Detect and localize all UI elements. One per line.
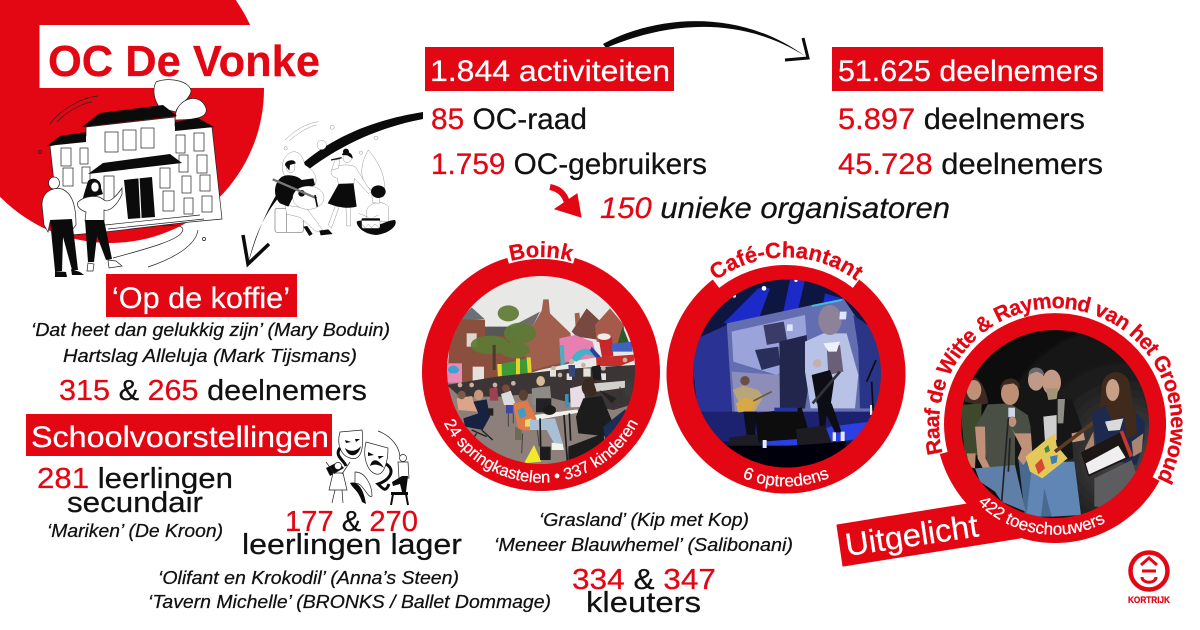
heading: Schoolvoorstellingen: Schoolvoorstellingen — [31, 421, 329, 454]
stat: 150 unieke organisatoren: 150 unieke organisatoren — [600, 192, 950, 225]
black curved arrow: activities to deelnemers — [603, 21, 808, 60]
title: OC De Vonke: OC De Vonke — [48, 37, 320, 86]
stat: 177 & 270 leerlingen lager: leerlingen lager — [242, 529, 462, 561]
photo: Boink crowd and bouncy castles — [447, 276, 635, 464]
stat: 281 leerlingen secundair: secundair — [67, 487, 203, 519]
stat: 5.897 deelnemers: 5.897 deelnemers — [838, 103, 1085, 136]
heading: 51.625 deelnemers: 51.625 deelnemers — [838, 55, 1098, 88]
caption: 6 optredens: 6 optredens — [744, 468, 829, 488]
red arrow to organisers — [550, 187, 581, 217]
red background circle — [0, 0, 264, 243]
caption: 24 springkastelen, 337 kinderen: 24 springkastelen • 337 kinderen — [444, 419, 638, 483]
heading: 1.844 activiteiten — [425, 47, 674, 91]
text: Mariken: ‘Mariken’ (De Kroon) — [47, 521, 223, 541]
stat: 177 & 270 leerlingen lager — [242, 506, 462, 561]
stat: 281 leerlingen secundair: 281 leerlingen — [37, 463, 233, 495]
label: Café-Chantant: Café-Chantant — [710, 241, 863, 281]
heading: Op de koffie: ‘Op de koffie’ — [112, 282, 290, 315]
panel: Uitgelicht ribbon — [837, 504, 1020, 566]
photo: concert stage — [693, 280, 881, 468]
label: Raaf de Witte & Raymond van het Groenewoud: Raaf de Witte & Raymond van het Groenewoud — [924, 296, 1183, 485]
caption: 422 toeschouwers: 422 toeschouwers — [980, 498, 1105, 535]
black curved arrow: OC-raad to Op de koffie — [243, 112, 423, 264]
stat: 334 & 347 kleuters — [572, 564, 716, 619]
stat: 45.728 deelnemers: 45.728 deelnemers — [838, 148, 1103, 181]
panel: Café-Chantant photo circle — [666, 241, 906, 494]
text: Grasland: ‘Grasland’ (Kip met Kop) — [539, 510, 749, 530]
illustration: theatre masks and figures — [326, 430, 409, 505]
text: Tavern Michelle: ‘Tavern Michelle’ (BRONKS / Ballet Dommage) — [148, 592, 551, 612]
photo: band portrait — [961, 330, 1149, 518]
label: Boink: Boink — [509, 241, 574, 262]
illustration: musicians — [273, 122, 396, 236]
stat: 334 & 347 kleuters: kleuters — [586, 587, 701, 619]
stat: 281 leerlingen secundair — [37, 463, 233, 519]
stat: 85 OC-raad: 85 OC-raad — [431, 103, 587, 136]
illustration: building and two people — [38, 80, 222, 277]
stat: 1.759 OC-gebruikers: 1.759 OC-gebruikers — [431, 148, 707, 181]
stat: 177 & 270 leerlingen lager: 177 & 270 — [285, 506, 418, 538]
logo: Kortrijk: KORTRIJK — [1128, 595, 1170, 606]
text: Olifant en Krokodil: ‘Olifant en Krokodil’ (Anna’s Steen) — [158, 568, 459, 588]
panel: Uitgelicht ribbon: Uitgelicht — [843, 507, 981, 563]
stat: 315 & 265 deelnemers: 315 & 265 deelnemers — [59, 375, 367, 407]
text: Meneer Blauwhemel: ‘Meneer Blauwhemel’ (Salibonani) — [494, 535, 793, 555]
stat: 334 & 347 kleuters: 334 & 347 — [572, 564, 716, 596]
logo: Kortrijk — [1128, 552, 1170, 606]
text: Dat heet dan gelukkig zijn: ‘Dat heet dan gelukkig zijn’ (Mary Boduin) — [31, 320, 390, 340]
text: Hartslag Alleluja: Hartslag Alleluja (Mark Tijsmans) — [63, 346, 357, 366]
heading: 1.844 activiteiten: 1.844 activiteiten — [430, 55, 670, 88]
panel: Raaf de Witte photo circle — [924, 296, 1183, 543]
panel: Boink photo circle — [422, 241, 660, 491]
